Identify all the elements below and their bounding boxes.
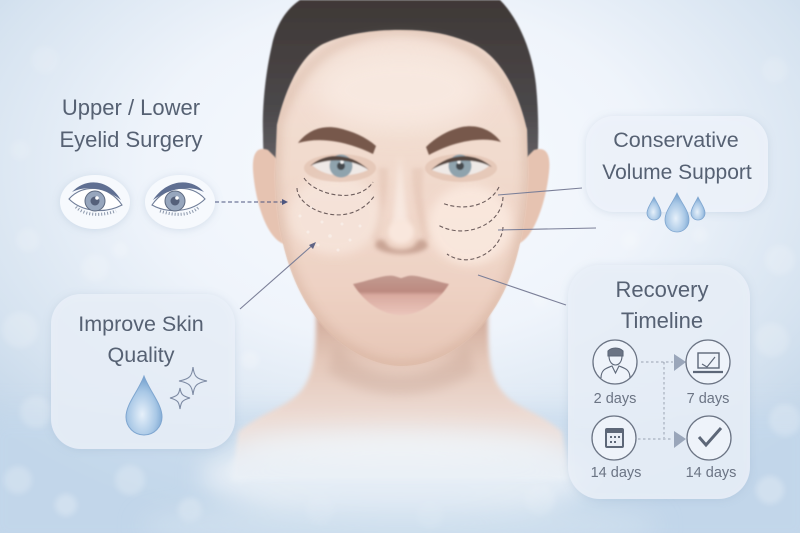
icon: large droplet [126,376,162,435]
arrow: eyelid to face [215,199,288,205]
callout lines [240,188,596,309]
step: 14 days check [686,416,736,481]
icon: left eye badge [60,175,130,229]
step: 7 days laptop: 7 days [687,391,729,407]
nose [375,220,428,254]
hair [263,0,538,190]
step: 7 days laptop [686,340,730,407]
heading: recovery timeline [616,277,708,333]
heading: conservative volume support: Conservative [613,128,739,152]
ears [253,149,292,244]
connector lines [638,362,673,439]
icon: right eye badge [145,175,215,229]
arrow tip: skin quality [309,242,316,249]
treatment dashed contours [297,178,503,260]
panel: conservative volume support [586,116,768,232]
cheek skin texture [289,175,381,255]
icon: sparkles [170,367,207,409]
icon: three droplets [647,193,705,232]
heading: improve skin quality [78,312,204,367]
neck [232,310,570,480]
panel: recovery timeline [568,265,750,499]
step: 2 days doctor: 2 days [594,391,636,407]
heading: eyelid surgery [59,95,203,152]
face [275,30,528,366]
step: 14 days calendar: 14 days [591,465,641,481]
right eye [425,154,497,182]
fog over neck base [140,427,660,533]
heading: improve skin quality: Improve Skin [78,312,204,336]
heading: conservative volume support [602,128,752,184]
left eye [304,154,376,182]
heading: eyelid surgery: Eyelid Surgery [59,127,203,152]
step: 2 days doctor [593,340,637,407]
heading: improve skin quality: Quality [108,343,175,367]
eyebrows [298,126,501,155]
portrait [140,0,660,533]
step: 14 days check: 14 days [686,465,736,481]
heading: recovery timeline: Timeline [621,308,703,333]
step: 14 days calendar [591,416,641,481]
heading: eyelid surgery: Upper / Lower [62,95,200,120]
arrowheads [674,354,686,448]
heading: conservative volume support: Volume Support [602,161,752,184]
heading: recovery timeline: Recovery [616,277,708,302]
panel: improve skin quality [51,294,235,449]
lips [353,276,449,315]
